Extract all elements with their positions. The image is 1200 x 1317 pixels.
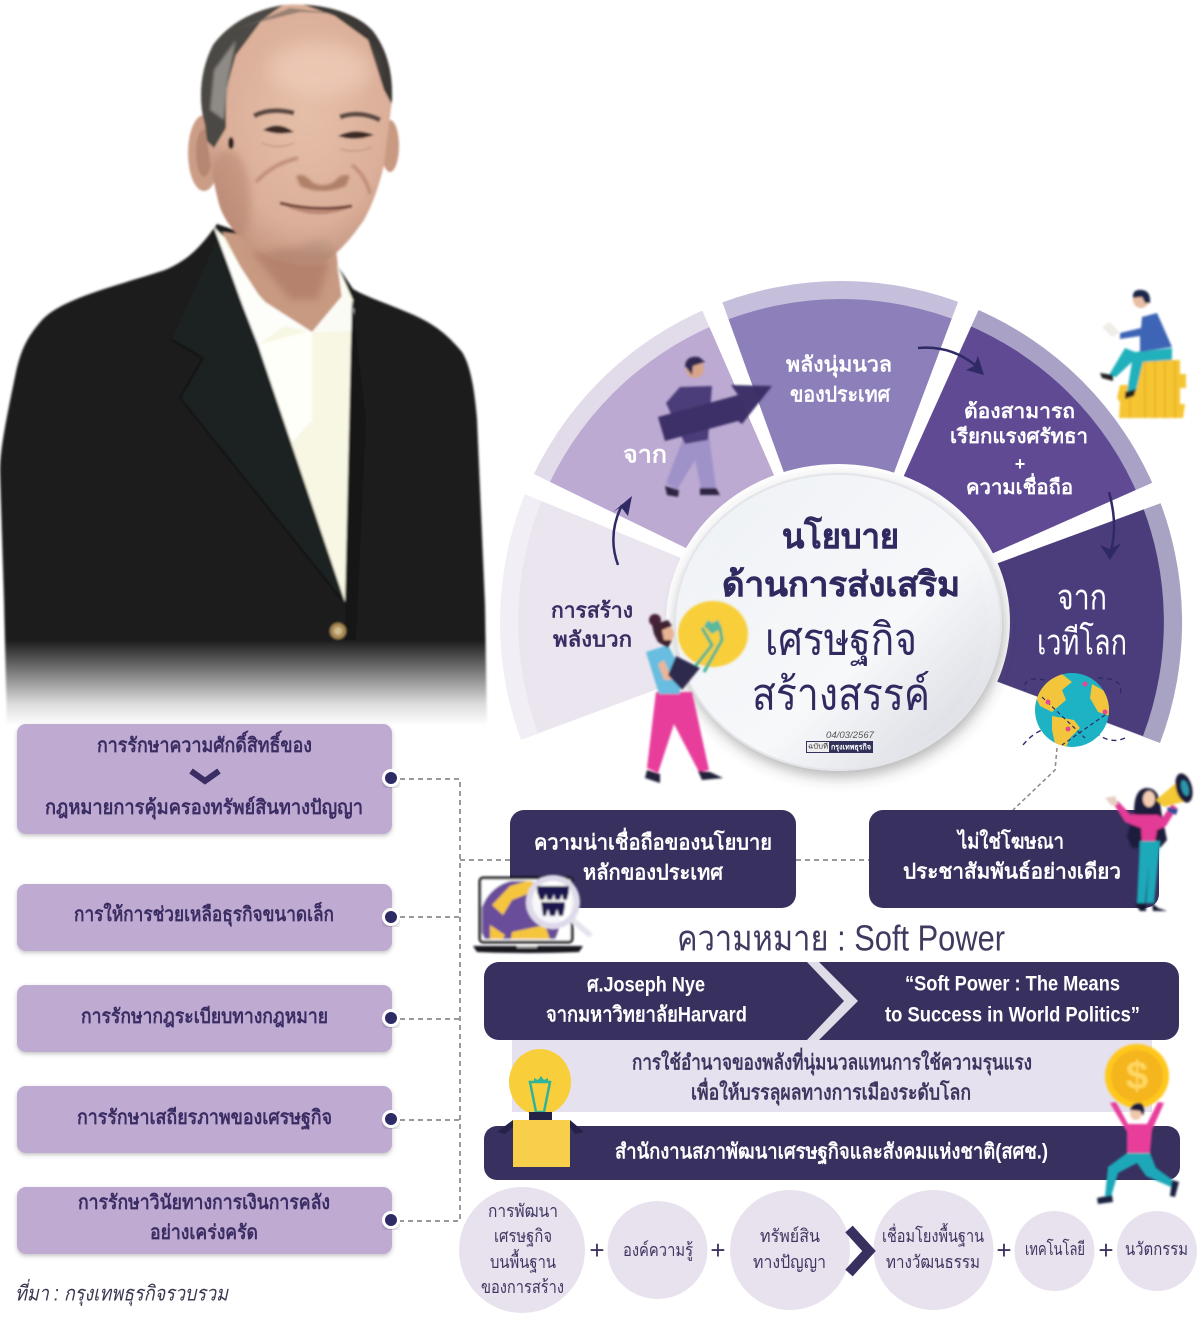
box: fiscal discipline: การรักษาวินัยทางการเงินการคลัง [78,1192,330,1214]
text: book title [885,972,1140,1026]
circle: intellectual property: ทรัพย์สิน [760,1226,820,1246]
lapel shading [172,240,343,602]
source note: ที่มา : กรุงเทพธุรกิจรวบรวม [15,1278,229,1306]
sector: soft power of the country [710,281,972,622]
wheel sector text: creating positive power: พลังบวก [553,628,632,652]
nose [296,175,350,191]
central disc with title [666,464,1010,780]
circle: technology: เทคโนโลยี [1025,1238,1085,1259]
banner: Joseph Nye and book [484,962,1179,1040]
jacket [0,224,487,730]
newspaper logo [806,741,873,753]
text: Joseph Nye: ศ.Joseph Nye [587,974,705,996]
icon: light bulb in yellow box [497,1049,584,1167]
sector: from the world stage [838,492,1182,743]
box: rule of law [17,985,392,1052]
mouth [285,206,352,214]
plus sign: + [996,1235,1012,1265]
box: economic stability [17,1086,392,1153]
circle: economic development on basis of creation: การพัฒนา [488,1201,558,1221]
dashed connector: globe to not-only-PR box [1013,748,1057,810]
right ear [381,120,399,172]
wheel sector text: from the world stage [1037,576,1127,662]
cheek and jaw shading [206,44,370,268]
eyes [263,125,374,139]
text: Joseph Nye [546,974,747,1026]
chevron connector [849,1229,869,1273]
wheel sector text: credibility: + [1015,454,1025,474]
circle: innovation: นวัตกรรม [1125,1239,1188,1259]
banner: NESDC: สำนักงานสภาพัฒนาเศรษฐกิจและสังคมแห่งชาติ(สศช.) [615,1140,1048,1166]
arrow: credibility to world stage [1100,492,1121,560]
icon: person lifting dollar coin: $ [1126,1054,1148,1098]
wheel sector text: credibility: เรียกแรงศรัทธา [950,425,1088,448]
strip: definition of soft power: เพื่อให้บรรลุผลทางการเมืองระดับโลก [691,1076,971,1106]
icon: man holding light bulb [645,601,748,783]
circle: cultural linkage: ทางวัฒนธรรม [886,1252,980,1272]
plus sign: + [710,1235,726,1265]
plus sign: + [1098,1235,1114,1265]
sector: must command faith and credibility [838,307,1156,622]
box: protecting intellectual property [17,724,392,834]
icon: man carrying arrow [658,357,772,497]
circle: economic development on basis of creation: บนพื้นฐาน [490,1249,556,1273]
panel: left list of requirements [17,724,398,1254]
box: protecting intellectual property: กฎหมายการคุ้มครองทรัพย์สินทางปัญญา [45,796,363,820]
box: credibility of core policy [510,810,796,908]
shirt [214,228,353,602]
circle: economic development on basis of creation [459,1187,585,1313]
wheel sector text: from: จาก [623,442,667,468]
chin stubble [302,240,334,256]
circle: economic development on basis of creation: เศรษฐกิจ [494,1226,552,1247]
text: book title: “Soft Power : The Means [905,972,1120,996]
face [201,4,392,265]
wheel sector text: soft power [786,354,892,406]
heading: meaning of soft power: ความหมาย : Soft Power [677,918,1005,958]
wheel sector text: from the world stage: เวทีโลก [1037,622,1127,662]
box: credibility of core policy: หลักของประเทศ [583,862,724,884]
title: promotion: ด้านการส่งเสริม [722,566,960,604]
left ear [188,115,220,191]
icon: person lifting dollar coin [1097,1044,1179,1204]
collar left [214,226,312,346]
icon: laptop with globe and magnifier [473,878,589,960]
box: fiscal discipline: อย่างเคร่งครัด [150,1222,258,1244]
panel: policy wheel [495,274,1186,743]
wheel sector text: soft power: ของประเทศ [790,384,891,406]
box: protecting intellectual property: การรักษาความศักดิ์สิทธิ์ของ [97,730,312,757]
circle: innovation [1117,1211,1197,1291]
arrow: from positive power up [613,496,632,565]
eyebrows [254,111,380,120]
hair [196,0,396,148]
box: small business support [17,884,392,951]
portrait photo of man in black suit [0,0,495,732]
icon: globe with orbit [1023,673,1125,752]
strip: definition of soft power: การใช้อำนาจของพลังที่นุ่มนวลแทนการใช้ความรุนแรง [632,1046,1032,1076]
strip: definition of soft power [512,1040,1152,1112]
wheel sector text: soft power: พลังนุ่มนวล [786,354,892,378]
wheel sector text: from the world stage: จาก [1057,576,1107,618]
box: not only advertising [869,810,1159,908]
circle: intellectual property [730,1190,850,1310]
circle: cultural linkage: เชื่อมโยงพื้นฐาน [882,1223,984,1247]
box: not only advertising: ไม่ใช่โฆษณา [956,828,1064,854]
icon: man sitting on coin stack [1100,290,1186,418]
wheel sector text: creating positive power: การสร้าง [551,598,633,622]
connector lines from left boxes [400,779,869,1221]
bottom fade [0,640,495,732]
icon: woman with megaphone [1105,771,1196,911]
mole [228,137,234,149]
circle: economic development on basis of creation: ของการสร้าง [481,1277,564,1297]
circle: body of knowledge: องค์ความรู้ [623,1240,693,1261]
newspaper logo: กรุงเทพธุรกิจ [831,742,871,752]
date stamp: 04/03/2567 [826,730,875,740]
box: economic stability: การรักษาเสถียรภาพของเศรษฐกิจ [77,1106,332,1131]
equation: components of creative economy [459,1187,1197,1313]
connector dots [384,770,398,1228]
collar right [312,264,354,332]
wheel sector text: credibility: ต้องสามารถ [964,400,1075,423]
circle: intellectual property: ทางปัญญา [753,1252,826,1272]
box: credibility of core policy: ความน่าเชื่อถือของนโยบาย [534,826,772,854]
plus sign: + [589,1235,605,1265]
title: policy: นโยบาย [782,516,899,556]
box: rule of law: การรักษากฎระเบียบทางกฎหมาย [81,1005,328,1028]
circle: cultural linkage [874,1190,994,1310]
title: creative: สร้างสรรค์ [752,670,930,720]
text: book title: to Success in World Politics” [885,1004,1140,1026]
box: small business support: การให้การช่วยเหลือธุรกิจขนาดเล็ก [74,901,334,927]
button [330,623,346,639]
box: fiscal discipline [17,1187,392,1254]
sector: from [526,307,838,622]
sector: creating positive power [500,492,838,740]
wheel sector text: credibility [950,400,1088,499]
text: Joseph Nye: จากมหาวิทยาลัยHarvard [546,1004,747,1026]
wheel sector text: credibility: ความเชื่อถือ [966,472,1073,499]
neck [222,232,342,332]
arrow: soft power to credibility [918,348,984,375]
circle: body of knowledge [608,1201,708,1299]
box: not only advertising: ประชาสัมพันธ์อย่างเดียว [903,860,1121,884]
chevron divider [807,962,858,1040]
title: economy: เศรษฐกิจ [765,616,917,666]
banner: NESDC [484,1126,1180,1180]
newspaper logo: ฉบับที่ [808,742,828,750]
wheel sector text: creating positive power [551,598,633,652]
icon: down chevron [191,771,219,781]
circle: technology [1014,1211,1094,1291]
